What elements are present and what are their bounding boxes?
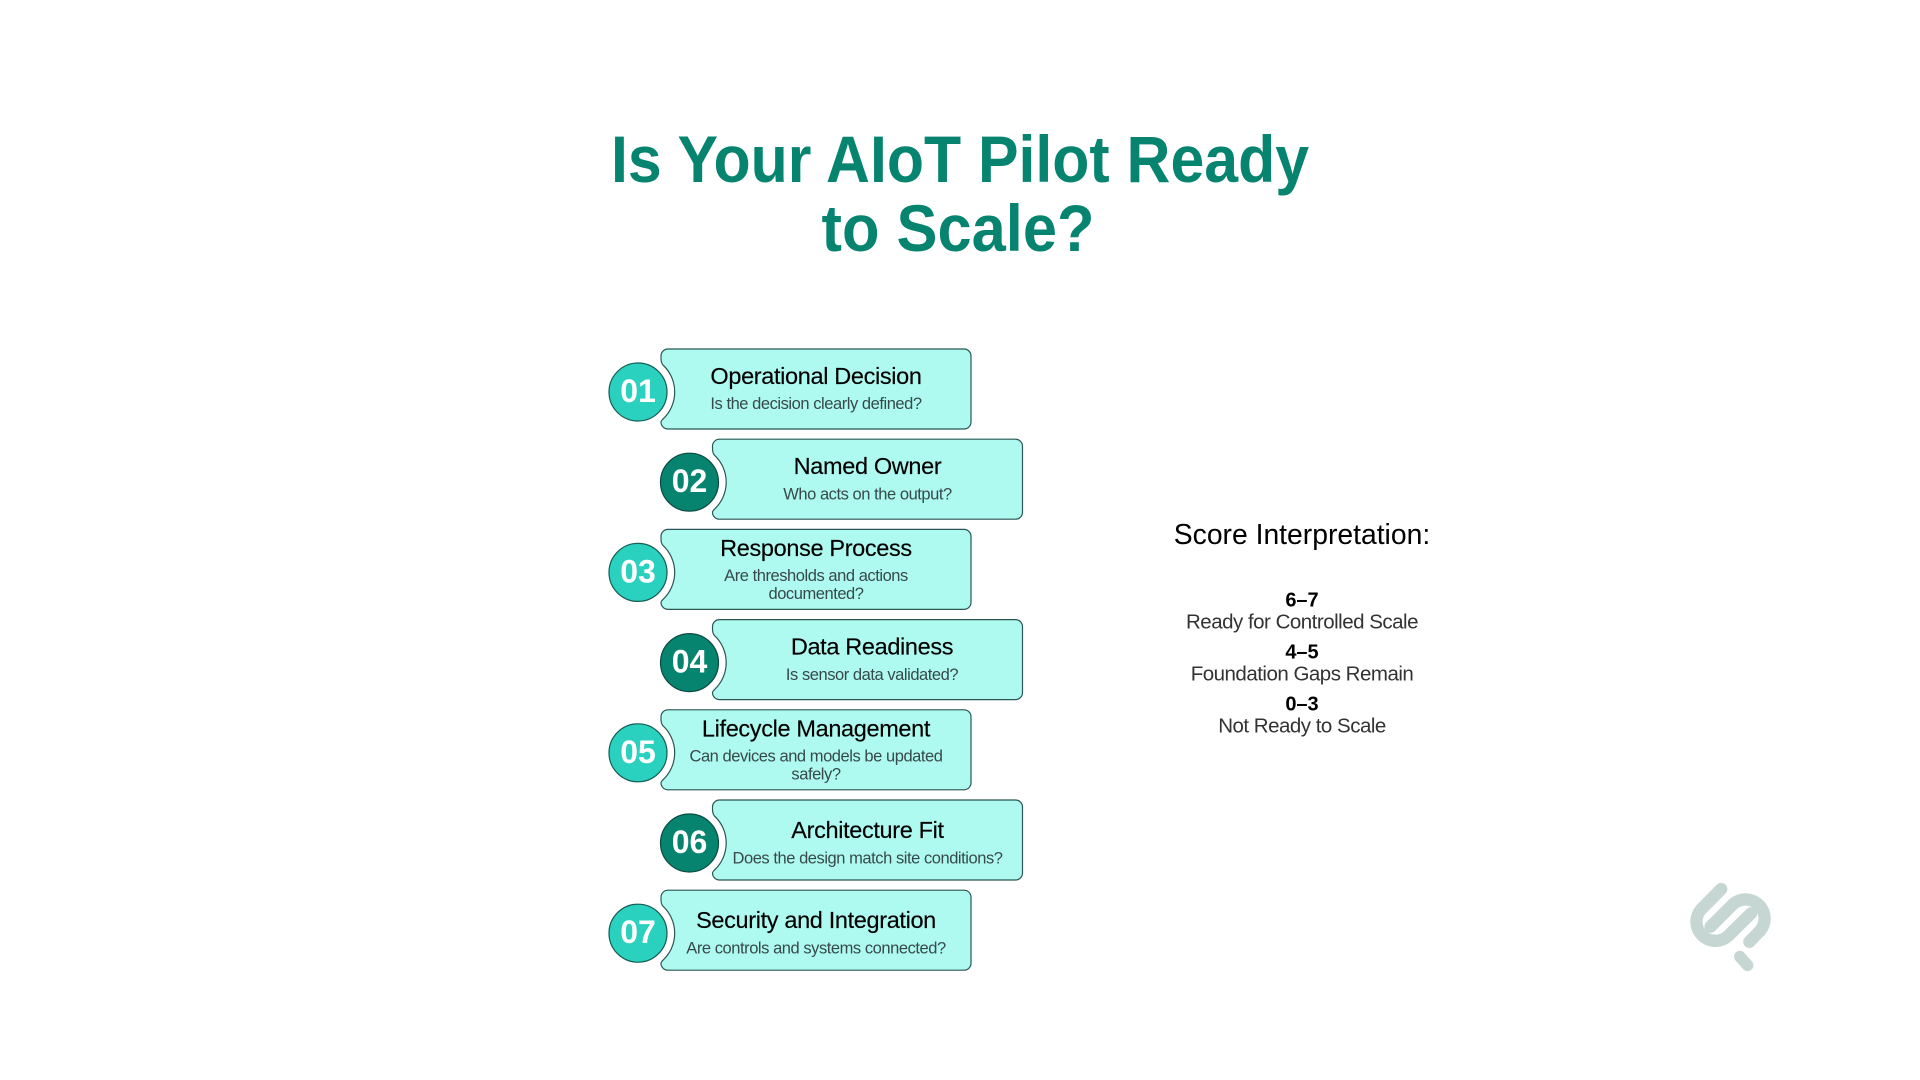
panel: checklist [609,349,1022,970]
item 05: lifecycle management: Can devices and models be updated [689,747,943,765]
item 07: security and integration: 07 [620,914,656,950]
item 07: security and integration: Security and Integration [696,907,936,933]
item 02: named owner: Named Owner [794,453,942,479]
item 06: architecture fit: Architecture Fit [791,817,945,843]
score 6-7 [1186,590,1418,634]
item 01: operational decision: Operational Decision [710,363,922,389]
item 06: architecture fit: 06 [672,824,707,860]
score 4-5: Foundation Gaps Remain [1191,662,1413,686]
score 0-3 [1218,694,1386,738]
title [611,122,1309,265]
icon: logo [1696,889,1765,965]
score 4-5 [1191,642,1413,686]
item 01: operational decision: Is the decision clearly defined? [710,395,922,413]
panel: score interpretation [1174,518,1430,738]
item 03: response process [609,529,971,609]
item 02: named owner [660,439,1022,519]
item 05: lifecycle management: safely? [791,765,841,783]
score 0-3: 0–3 [1285,694,1319,716]
score 4-5: 4–5 [1285,642,1319,664]
item 04: data readiness: Is sensor data validated? [786,666,958,684]
item 03: response process: 03 [620,553,656,589]
item 02: named owner: 02 [672,463,707,499]
item 04: data readiness: Data Readiness [791,634,953,660]
item 03: response process: documented? [768,585,864,603]
item 03: response process: Response Process [720,535,912,561]
heading: score interpretation: Score Interpretation: [1174,518,1430,550]
score 6-7: 6–7 [1285,590,1319,612]
item 04: data readiness [660,620,1022,700]
title: to Scale? [822,191,1094,265]
item 01: operational decision: 01 [620,373,656,409]
score 0-3: Not Ready to Scale [1218,714,1386,738]
title: Is Your AIoT Pilot Ready [611,122,1309,196]
item 07: security and integration [609,890,971,970]
item 02: named owner: Who acts on the output? [783,486,952,504]
item 05: lifecycle management: Lifecycle Management [702,715,931,741]
item 05: lifecycle management: 05 [620,734,656,770]
item 03: response process: Are thresholds and actions [724,567,908,585]
item 01: operational decision [609,349,971,429]
item 06: architecture fit: Does the design match site conditions? [733,850,1003,868]
item 07: security and integration: Are controls and systems connected? [686,940,946,958]
item 04: data readiness: 04 [672,644,708,680]
item 05: lifecycle management [609,710,971,790]
score 6-7: Ready for Controlled Scale [1186,610,1418,634]
item 06: architecture fit [660,800,1022,880]
